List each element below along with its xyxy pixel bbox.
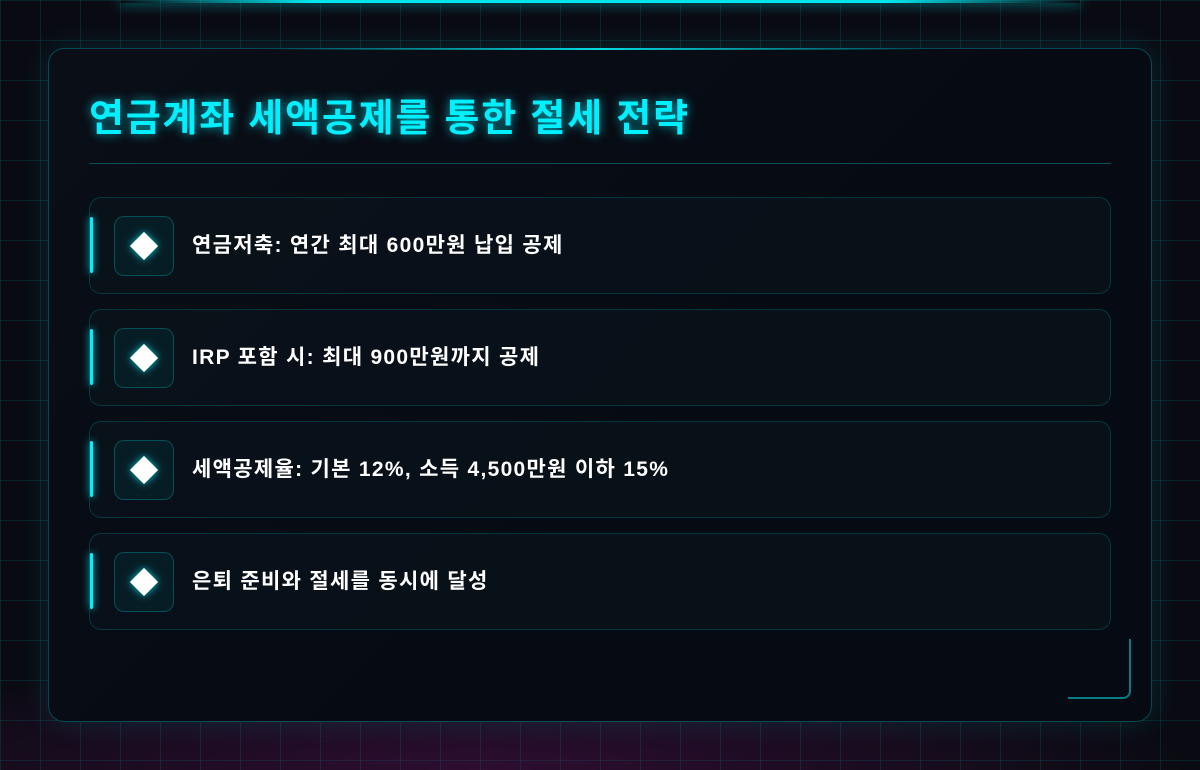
item 2 xyxy=(89,309,1111,406)
text: 세액공제율: 기본 12%, 소득 4,500만원 이하 15% xyxy=(192,458,669,481)
title: 연금계좌 세액공제를 통한 절세 전략 xyxy=(89,98,690,140)
item 4 xyxy=(89,533,1111,630)
icon: diamond xyxy=(114,440,174,500)
text: 은퇴 준비와 절세를 동시에 달성 xyxy=(192,570,489,593)
icon: diamond xyxy=(114,328,174,388)
item 3 xyxy=(89,421,1111,518)
icon: diamond xyxy=(114,552,174,612)
text: 연금저축: 연간 최대 600만원 납입 공제 xyxy=(192,234,564,257)
icon: diamond xyxy=(114,216,174,276)
text: IRP 포함 시: 최대 900만원까지 공제 xyxy=(192,346,540,369)
item 1 xyxy=(89,197,1111,294)
corner decoration xyxy=(1068,639,1131,699)
